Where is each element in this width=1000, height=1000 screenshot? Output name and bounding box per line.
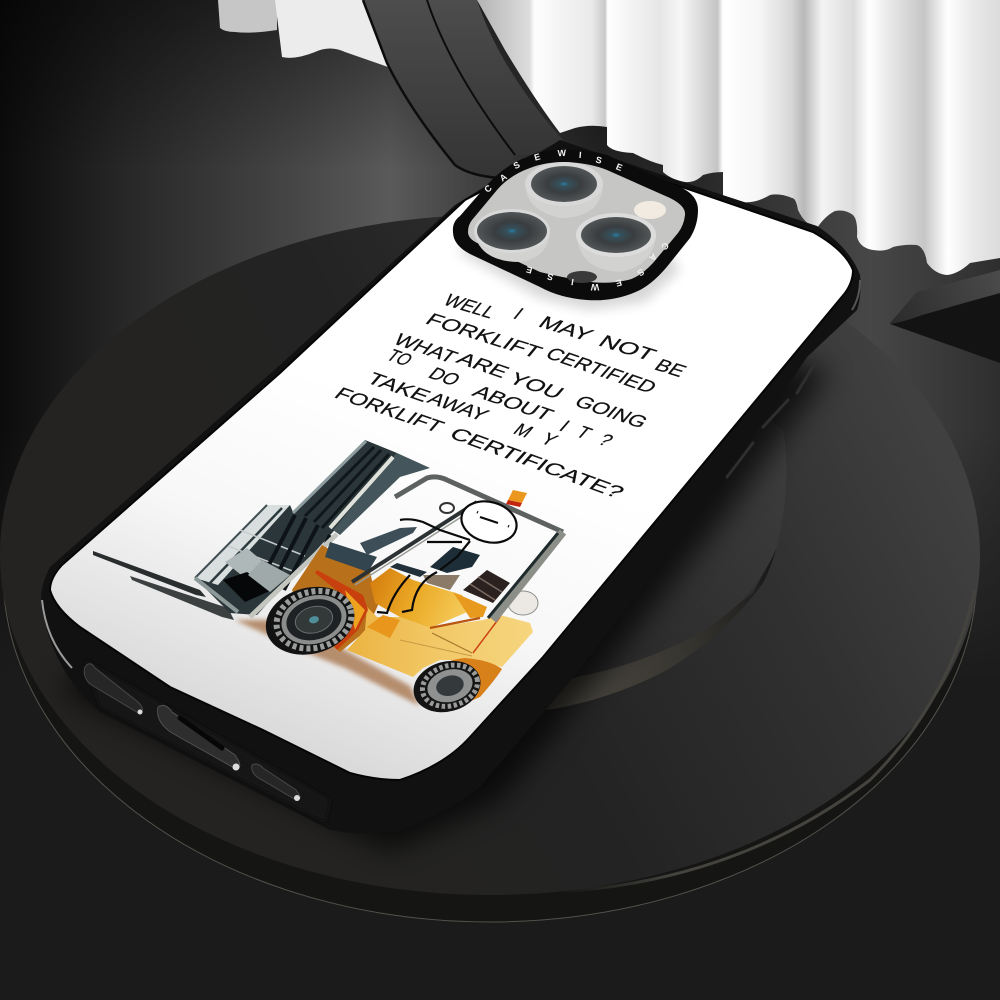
casewise labels: S <box>512 160 522 171</box>
large round platform <box>0 215 980 922</box>
body lower <box>347 607 533 677</box>
small round platform <box>470 420 786 710</box>
handwritten text: I <box>509 304 528 323</box>
camera island <box>453 148 698 300</box>
handwritten text <box>330 290 691 502</box>
handwritten text: AWAY <box>423 389 494 425</box>
back curtain left <box>218 0 388 67</box>
engine cylinder and light <box>463 570 538 615</box>
handwritten text: TAKE <box>362 369 435 405</box>
side buttons <box>727 363 815 477</box>
handwritten text: MY <box>509 420 563 450</box>
handwritten text: ARE <box>452 349 514 381</box>
casewise labels: S <box>595 154 603 166</box>
casewise labels <box>482 148 671 292</box>
ground shadow <box>235 620 420 706</box>
mast <box>195 440 430 617</box>
handwritten text: DO <box>424 364 465 389</box>
bottom ports <box>84 664 300 801</box>
casewise labels: I <box>570 277 575 287</box>
body details <box>315 570 502 710</box>
stick figure <box>377 495 521 613</box>
lens right <box>576 213 656 272</box>
handwritten text: ABOUT <box>468 382 558 424</box>
forks <box>93 551 234 620</box>
front wheel <box>258 577 362 664</box>
lens top <box>525 162 603 218</box>
casewise labels: S <box>546 271 554 283</box>
forklift illustration <box>93 440 563 719</box>
handwritten text: WELL <box>439 290 501 322</box>
casewise labels: C <box>482 182 494 195</box>
handwritten text: CERTIFIED <box>541 344 661 397</box>
phone case body <box>41 140 861 834</box>
phone screen <box>50 150 853 780</box>
handwritten text: FORKLIFT <box>330 384 449 436</box>
handwritten text: MAY <box>534 312 598 345</box>
casewise labels: S <box>635 267 646 278</box>
lens left <box>474 209 550 262</box>
casewise labels: A <box>647 251 659 263</box>
right stand <box>890 270 1000 363</box>
flash <box>634 201 666 219</box>
casewise labels: W <box>590 282 599 292</box>
handwritten text: CERTIFICATE? <box>445 424 629 502</box>
beacon <box>506 490 527 507</box>
curved stand bands <box>363 0 563 178</box>
handwritten text: TO <box>382 346 417 369</box>
overhead guard <box>352 477 563 620</box>
phone shadow <box>60 300 830 850</box>
casewise labels: C <box>659 240 671 252</box>
casewise labels: E <box>533 151 541 163</box>
sensor <box>567 271 597 283</box>
casewise labels: A <box>498 171 509 184</box>
camera shadow on screen <box>455 230 680 310</box>
handwritten text: BE <box>650 355 691 380</box>
curtain <box>477 0 1000 275</box>
frame behind front wheel <box>292 545 378 652</box>
casewise labels: E <box>525 264 533 276</box>
casewise labels: I <box>579 150 582 160</box>
casewise labels: E <box>614 161 624 173</box>
handwritten text: IT? <box>555 417 618 450</box>
handwritten text: GOING <box>570 392 653 432</box>
casewise labels: W <box>557 148 567 158</box>
rear wheel <box>408 654 486 719</box>
handwritten text: YOU <box>504 369 569 402</box>
body upper <box>370 568 472 628</box>
handwritten text: FORKLIFT <box>421 309 547 362</box>
dash and seat <box>325 527 480 590</box>
casewise labels: E <box>615 277 623 289</box>
handwritten text: NOT <box>594 331 661 364</box>
handwritten text: WHAT <box>389 330 462 366</box>
